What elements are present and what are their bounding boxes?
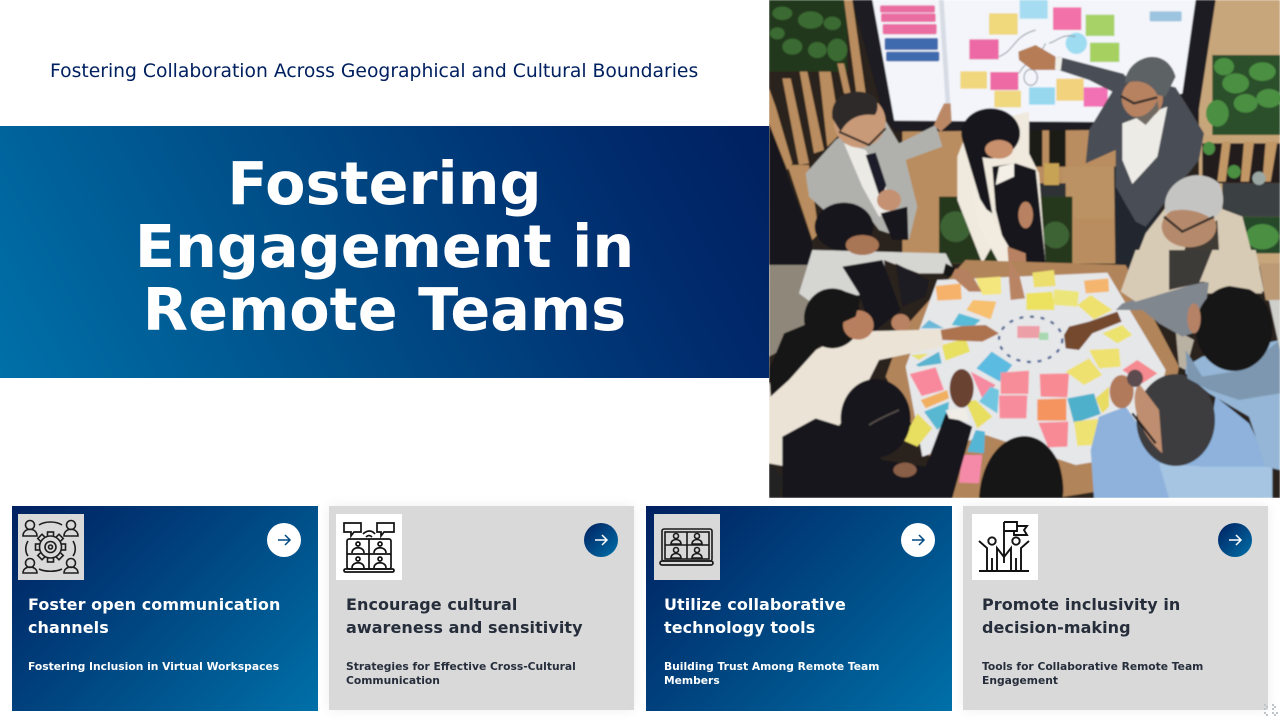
man in dark suit [782, 369, 974, 498]
card heading: Utilize collaborative technology tools [664, 595, 846, 637]
man in light jacket top left [799, 203, 1025, 333]
arrow button [901, 523, 935, 557]
card heading: awareness and sensitivity [346, 618, 583, 637]
card: encourage cultural awareness [329, 506, 634, 710]
table and paper [769, 203, 1280, 498]
card heading: Encourage cultural [346, 595, 517, 614]
title: Engagement in [135, 212, 634, 281]
icon: people around a gear [18, 514, 84, 580]
card heading: Foster open communication channels [28, 595, 280, 637]
title [135, 149, 634, 344]
woman in white and black [957, 108, 1046, 293]
older man beige jacket [1122, 175, 1262, 293]
left plant and slats [769, 0, 847, 72]
subtitle: Fostering Collaboration Across Geographical and Cultural Boundaries [50, 61, 698, 82]
man in light blue shirt [1091, 370, 1272, 498]
photo: team collaborating around a table with sticky notes [769, 0, 1280, 498]
card heading: Promote inclusivity in decision-making [982, 595, 1180, 637]
woman with bob haircut, blue-grey jacket [1064, 282, 1280, 470]
beige sleeve lower [1121, 250, 1264, 302]
icon: two people raising a flag [972, 514, 1038, 580]
card: utilize collaborative tools [646, 506, 952, 711]
dotted ring diagram [999, 317, 1062, 362]
resize handle dots [1264, 704, 1278, 716]
card text: Building Trust Among Remote Team Members [664, 660, 879, 686]
icon: video grid with chat bubbles [336, 514, 402, 580]
sticky notes [902, 270, 1161, 483]
screen [852, 0, 1216, 132]
woman front center [979, 436, 1063, 498]
man pointing: dark blazer [1018, 45, 1204, 333]
arrow button [1218, 523, 1252, 557]
card: promote inclusivity [963, 506, 1268, 710]
title: Remote Teams [143, 275, 626, 344]
title: Fostering [227, 149, 542, 218]
card: foster open communication [12, 506, 318, 711]
man in grey suit [806, 92, 952, 240]
wood wall and slats [902, 123, 1136, 263]
card text: Tools for Collaborative Remote Team Engagement [982, 660, 1203, 686]
title banner [0, 126, 769, 378]
right plant [1203, 58, 1280, 249]
arrow button [584, 523, 618, 557]
arrow button [267, 523, 301, 557]
icon: laptop video call [654, 514, 720, 580]
woman with ponytail [769, 288, 999, 498]
card text: Fostering Inclusion in Virtual Workspaces [28, 660, 279, 672]
card heading [346, 595, 583, 637]
card text: Strategies for Effective Cross-Cultural Communication [346, 660, 576, 686]
